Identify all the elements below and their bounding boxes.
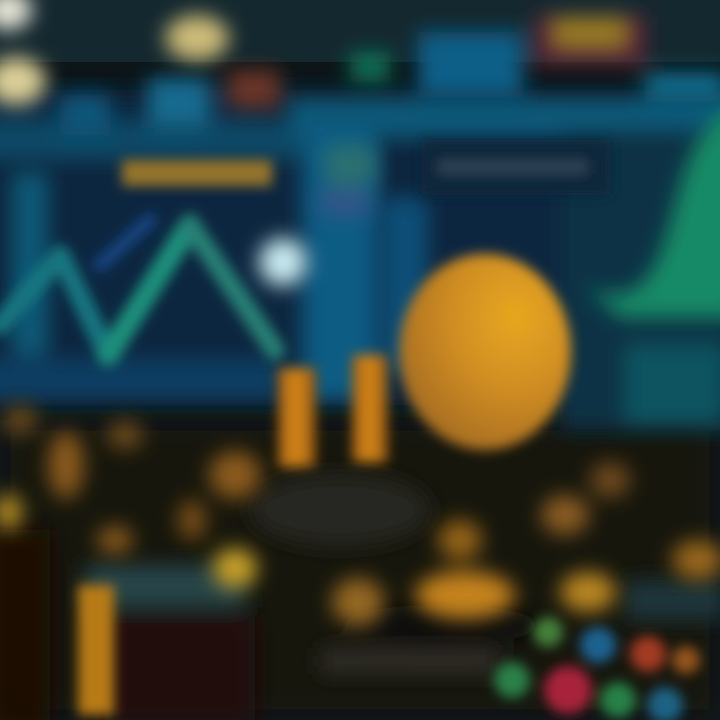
desk objects [0,474,720,720]
glow point [259,238,307,286]
colored keys [494,617,700,720]
heading bar: gold label [122,160,272,186]
area chart: green peak [585,105,720,318]
chart board panel [0,90,720,430]
line chart: zigzag [0,220,275,355]
top blue tags [60,15,720,135]
lamp: left [0,57,46,105]
orange bars [278,355,388,468]
coins on desk [0,406,720,626]
heading bar: dark label [422,140,610,195]
lamp: top left [0,0,32,30]
lamp: centre [165,15,229,61]
column stack [320,145,375,215]
gold coin [399,254,571,450]
top labels and lamps [0,0,720,135]
gold candle [78,585,114,715]
